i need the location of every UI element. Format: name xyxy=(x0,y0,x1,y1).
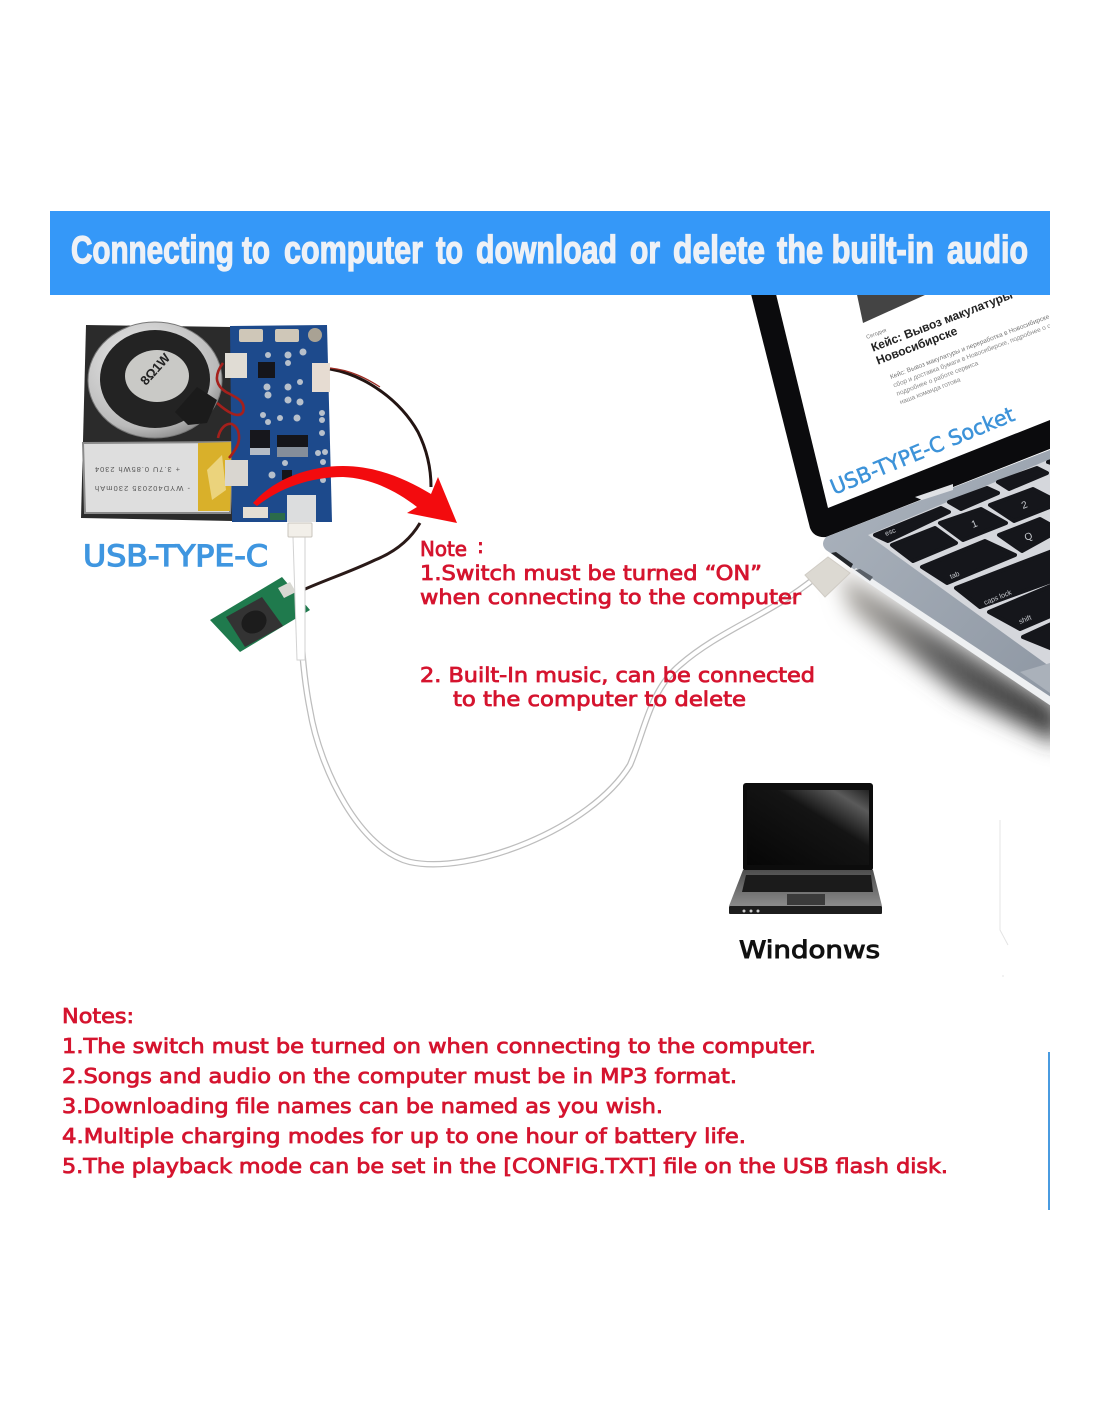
hinge xyxy=(915,484,953,500)
sound module board xyxy=(81,322,332,522)
screen article text: сбор и доставка бумаги в Новосибирске, подробнее о сервисе xyxy=(892,314,1072,389)
notes list xyxy=(62,1004,948,1178)
screen article text: Кейс: Вывоз макулатуры xyxy=(869,288,1015,355)
notes list: 1.The switch must be turned on when connecting to the computer. xyxy=(62,1034,816,1058)
laptop screen xyxy=(775,290,1060,508)
switch note xyxy=(420,534,802,609)
switch note: when connecting to the computer xyxy=(420,585,802,609)
screen article text: Кейс: Вывоз макулатуры и переработка в Новосибирске и области xyxy=(889,301,1080,381)
key legends: Q xyxy=(1023,531,1035,544)
push-button board xyxy=(210,577,310,652)
key legends: tab xyxy=(949,571,961,581)
black backing plate xyxy=(81,325,232,521)
Windows label: Windonws xyxy=(739,936,880,964)
key legends: 2 xyxy=(1020,499,1030,512)
switch note: 1.Switch must be turned “ON” xyxy=(420,561,762,585)
banner title: delete xyxy=(673,229,765,272)
banner title: audio xyxy=(947,229,1028,272)
blue PCB xyxy=(230,325,332,522)
banner title: the built-in xyxy=(777,229,934,272)
white USB cable xyxy=(299,537,815,864)
large laptop with USB-TYPE-C socket xyxy=(751,295,1050,758)
screen article text xyxy=(866,295,1050,404)
key legends: esc xyxy=(884,527,897,538)
cable plug at laptop xyxy=(805,557,850,597)
base front edge xyxy=(854,568,1050,706)
banner title: computer xyxy=(284,229,423,272)
PCB components xyxy=(225,328,330,522)
USB-TYPE-C label: USB-TYPE-C xyxy=(83,539,268,573)
notes list: Notes: xyxy=(62,1004,134,1028)
socket label: USB-TYPE-C Socket xyxy=(827,402,1018,500)
notes list: 3.Downloading file names can be named as you wish. xyxy=(62,1094,663,1118)
battery xyxy=(83,442,233,513)
built-in music note: 2. Built-In music, can be connected xyxy=(420,663,815,687)
USB plug at module xyxy=(288,523,312,660)
laptop lid bezel xyxy=(750,290,1060,537)
switch note: Note xyxy=(420,537,467,561)
screen article text: наша команда готова xyxy=(899,376,962,406)
speaker terminal xyxy=(175,387,217,425)
notes list: 4.Multiple charging modes for up to one hour of battery life. xyxy=(62,1124,746,1148)
speaker xyxy=(88,322,222,438)
screen article text: подробнее о работе сервиса xyxy=(895,359,980,398)
screen article text: Сегодня xyxy=(866,328,887,341)
built-in music note xyxy=(420,663,815,711)
key legends: 1 xyxy=(970,518,980,531)
battery label: + 3.7U 0.85Wh 2304 xyxy=(95,465,180,474)
key legends: shift xyxy=(1018,615,1033,626)
red arrow xyxy=(253,466,457,523)
screen photo xyxy=(857,295,925,323)
USB ports xyxy=(831,552,873,581)
blue heading banner xyxy=(50,211,1050,295)
switch note: : xyxy=(477,534,484,558)
banner title: or xyxy=(630,229,660,272)
screen article text: Новосибирске xyxy=(874,324,960,368)
battery label: - WYD402035 230mAh xyxy=(95,484,190,493)
trackpad edge xyxy=(1020,663,1050,693)
built-in music note: to the computer to delete xyxy=(453,687,746,711)
banner title: to xyxy=(436,229,463,272)
small Windows laptop icon xyxy=(729,783,882,914)
laptop base xyxy=(823,450,1050,696)
banner title: Connecting to xyxy=(71,229,270,272)
key legends xyxy=(884,499,1035,626)
button lead wire xyxy=(303,368,431,590)
keyboard keys xyxy=(875,458,1060,652)
battery label xyxy=(95,465,190,493)
key legends: caps lock xyxy=(983,589,1013,607)
banner title: download xyxy=(476,229,617,272)
speaker and battery leads xyxy=(217,363,244,458)
keyboard well xyxy=(868,459,1050,664)
speaker label: 8Ω1W xyxy=(137,350,174,388)
notes list: 5.The playback mode can be set in the [CONFIG.TXT] file on the USB flash disk. xyxy=(62,1154,948,1178)
notes list: 2.Songs and audio on the computer must be in MP3 format. xyxy=(62,1064,737,1088)
laptop shadow xyxy=(838,570,1060,745)
banner title xyxy=(71,229,1028,272)
